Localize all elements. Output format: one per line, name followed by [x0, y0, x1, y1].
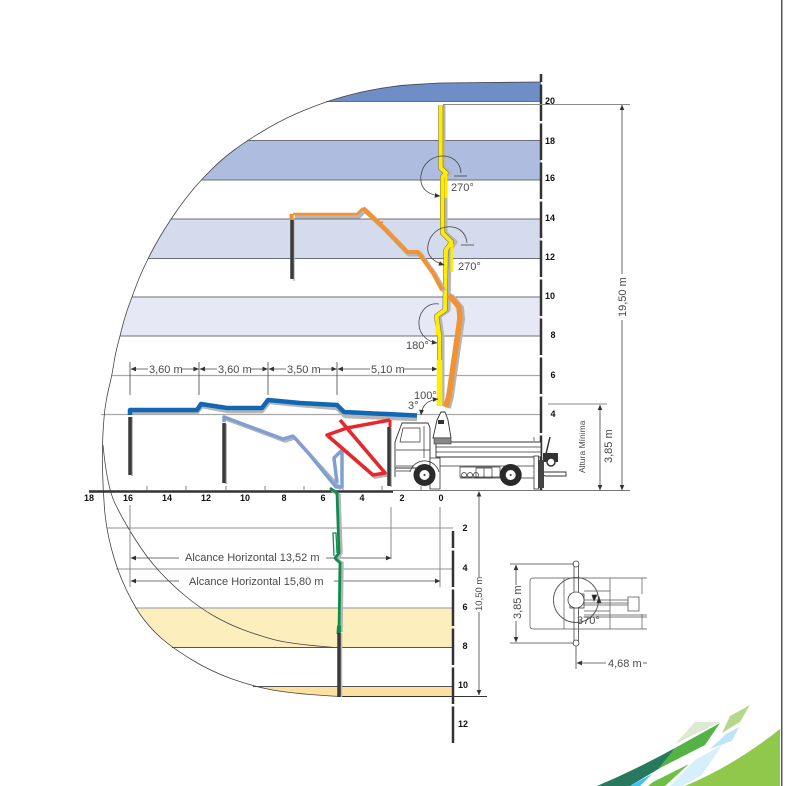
vertical height scale: 16 [545, 173, 555, 183]
depth scale: 4 [462, 563, 468, 573]
vertical height scale: 20 [545, 96, 555, 106]
horizontal reach scale: 2 [399, 493, 405, 503]
horizontal reach scale: 12 [201, 493, 211, 503]
horizontal reach scale: 4 [359, 493, 365, 503]
vertical height scale: 8 [550, 330, 556, 340]
dimension: segment lengths: 3,60 m [149, 364, 183, 376]
boom position: green below ground [330, 488, 342, 697]
reach bands [120, 82, 541, 696]
rotation arcs and angle labels: 3° [408, 400, 419, 412]
vertical height scale: 6 [550, 370, 556, 380]
rotation arcs and angle labels: 100° [414, 390, 437, 402]
rotation arcs and angle labels: 180° [406, 340, 429, 352]
boom position: orange raised [292, 208, 462, 408]
boom position: blue horizontal [130, 400, 417, 476]
horizontal reach scale: 16 [123, 493, 133, 503]
rotation arcs and angle labels: 270° [451, 182, 474, 194]
truck cab [395, 423, 430, 477]
horizontal reach scale: 6 [320, 493, 326, 503]
truck turret [433, 412, 451, 444]
logo: corner swoosh [597, 705, 780, 786]
plan: truck outline [530, 578, 647, 629]
vertical height scale: 14 [545, 213, 555, 223]
truck front wheel [410, 461, 439, 486]
truck hopper [538, 437, 566, 488]
vertical height scale: 4 [550, 409, 556, 419]
boom position: yellow vertical [436, 105, 455, 406]
plan: dimension 4,68 m: 4,68 m [608, 658, 642, 670]
vertical height scale: 12 [545, 252, 555, 262]
depth scale: 12 [458, 719, 468, 729]
vertical height scale [541, 74, 556, 491]
depth scale [453, 523, 468, 745]
horizontal reach scale: 0 [438, 493, 444, 503]
dimension: horizontal reach: Alcance Horizontal 15,80 m [189, 576, 324, 588]
rotation arcs and angle labels: 270° [458, 261, 481, 273]
boom position: red folded [327, 420, 391, 487]
dimension: segment lengths: 3,60 m [218, 364, 252, 376]
reach envelope curves [102, 82, 541, 696]
rotation arcs and angle labels [406, 156, 481, 415]
truck bed [430, 437, 541, 489]
depth scale: 10 [458, 680, 468, 690]
dimension: horizontal reach [130, 505, 440, 588]
depth scale: 6 [462, 602, 468, 612]
horizontal reach scale: 14 [162, 493, 172, 503]
truck rear wheel [500, 464, 522, 486]
dimension: minimum height 3,85 m: 3,85 m [603, 429, 615, 463]
horizontal reach scale: 18 [84, 493, 94, 503]
dimension: segment lengths [130, 362, 437, 395]
dimension: horizontal reach: Alcance Horizontal 13,52 m [185, 552, 320, 564]
horizontal reach scale: 8 [281, 493, 287, 503]
truck [395, 412, 566, 489]
dimension: segment lengths: 3,50 m [287, 364, 321, 376]
depth scale: 2 [462, 523, 468, 533]
plan: angle 370°: 370° [577, 615, 600, 627]
boom position: light blue folded [224, 417, 342, 489]
dimension: minimum height 3,85 m: Altura Mínima [577, 420, 587, 473]
plan: dimension 3,85 m: 3,85 m [512, 585, 524, 619]
horizontal reach scale: 10 [240, 493, 250, 503]
dimension: depth 10,50 m: 10,50 m [474, 577, 485, 611]
dimension: total height 19,50 m: 19,50 m [617, 277, 629, 317]
dimension: segment lengths: 5,10 m [371, 364, 405, 376]
depth scale: 8 [462, 641, 468, 651]
vertical height scale: 18 [545, 136, 555, 146]
page border line [781, 0, 782, 786]
plan view [510, 561, 647, 670]
plan: boom [584, 597, 639, 611]
grid lines [101, 102, 541, 696]
vertical height scale: 10 [545, 291, 555, 301]
plan: slewing circle [554, 561, 601, 646]
horizontal reach scale [84, 486, 630, 503]
dimension: minimum height 3,85 m [548, 404, 615, 490]
